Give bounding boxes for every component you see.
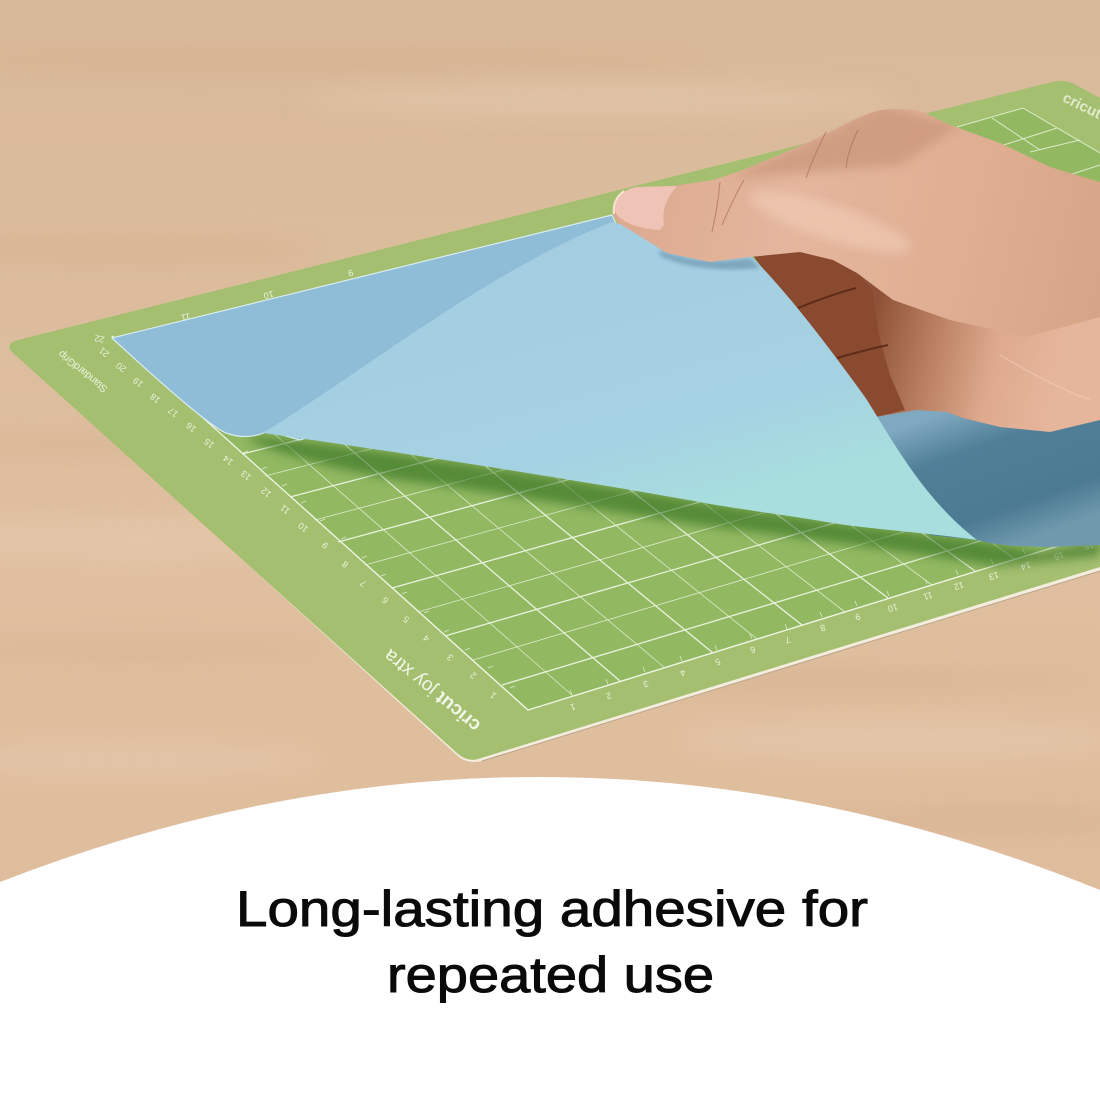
bottom ruler numbers: 11 [922, 590, 934, 602]
bottom ruler numbers: 12 [953, 580, 965, 592]
left ruler numbers: 19 [131, 375, 145, 389]
grid lines thin [231, 259, 1015, 696]
left ruler numbers: 8 [340, 559, 350, 570]
fingers in shadow [745, 245, 905, 417]
hand: palm and fingers behind card [745, 245, 1100, 432]
left ruler numbers: 16 [184, 420, 198, 434]
left ruler numbers: 4 [421, 633, 431, 644]
bottom ruler numbers: 6 [749, 644, 757, 655]
left ruler numbers: 10 [296, 520, 310, 534]
bottom ruler numbers: 9 [854, 611, 862, 622]
bottom ruler numbers: 4 [679, 667, 687, 678]
caption heading: repeated use [387, 947, 714, 1003]
bottom ruler numbers: 2 [605, 690, 613, 701]
bottom ruler numbers: 1 [569, 701, 577, 712]
left ruler numbers: 17 [166, 405, 180, 419]
thumbnail [614, 186, 677, 230]
light blue card, curled sheet [263, 222, 977, 540]
left ruler numbers: 20 [114, 360, 128, 374]
knuckle crease [712, 130, 858, 232]
mat grip label: StandardGrip [56, 348, 110, 395]
blue card underside, right shaded [840, 400, 1100, 547]
palm heel crease [1000, 355, 1090, 400]
bottom ruler numbers: 10 [887, 602, 899, 614]
left ruler numbers: 18 [148, 391, 162, 405]
top ruler numbers: 11 [180, 311, 191, 323]
left ruler numbers: 7 [358, 578, 368, 589]
bottom ruler numbers: 15 [1053, 550, 1065, 562]
caption heading [236, 881, 868, 1003]
left ruler numbers: 12 [259, 485, 273, 499]
bottom ruler numbers: 8 [819, 622, 827, 633]
top ruler numbers [180, 267, 354, 323]
left ruler numbers: 6 [380, 595, 390, 606]
mat surface [9, 81, 1100, 760]
bottom ruler numbers: 13 [988, 570, 1000, 582]
paper shadow on mat [250, 435, 1100, 566]
left ruler numbers: 9 [320, 540, 330, 551]
left ruler numbers: 5 [401, 614, 411, 625]
left ruler numbers [94, 333, 498, 701]
bottom ruler numbers: 5 [714, 656, 722, 667]
left ruler numbers: 3 [445, 652, 455, 663]
left ruler numbers: 13 [239, 468, 253, 482]
left ruler numbers: 15 [202, 436, 216, 450]
finger creases [798, 288, 888, 358]
mat grid area [112, 240, 1100, 710]
bottom ruler numbers: 14 [1020, 560, 1032, 572]
mat brand label: cricut joy xtra [380, 644, 485, 736]
top right grid corner [957, 89, 1100, 190]
mat edge thickness [8, 346, 1100, 762]
nail tip [614, 191, 624, 214]
cutting mat [8, 81, 1100, 762]
left ruler numbers: 21 [97, 345, 111, 359]
left ruler numbers: 11 [278, 503, 292, 516]
top ruler numbers: 9 [347, 267, 354, 278]
hand: back of hand and thumb [613, 105, 1100, 400]
thumb shadow on card [660, 250, 760, 270]
blue card underside, left [112, 215, 650, 440]
left ruler numbers: 1 [488, 690, 498, 701]
white curved caption panel [0, 777, 1100, 1100]
bottom ruler numbers: 16 [1083, 540, 1095, 552]
grid lines thick [242, 271, 1000, 685]
bottom ruler numbers: 3 [642, 678, 650, 689]
bottom ruler numbers: 7 [784, 634, 792, 645]
index knuckle shading [741, 109, 954, 254]
ruler ticks [243, 451, 1025, 695]
top ruler numbers: 10 [263, 289, 275, 301]
left ruler numbers: 2 [468, 670, 478, 681]
bottom ruler numbers [569, 540, 1095, 712]
left ruler numbers: 22 [94, 333, 105, 345]
grid border [112, 336, 1100, 710]
caption heading: Long-lasting adhesive for [236, 881, 868, 937]
left ruler numbers: 14 [221, 453, 235, 467]
